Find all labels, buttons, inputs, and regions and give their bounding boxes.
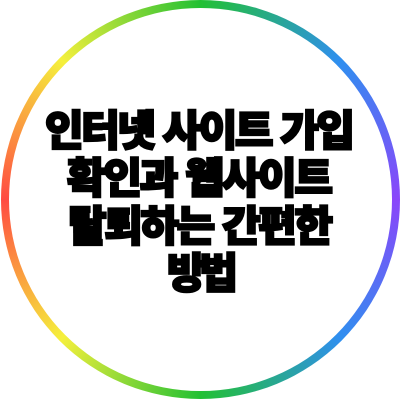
- title line 4: 방법: [167, 250, 238, 297]
- title line 2: 확인과 웹사이트: [67, 155, 333, 202]
- title line 1: 인터넷 사이트 가입: [45, 108, 355, 154]
- title line 3: 탈퇴하는 간편한: [68, 203, 333, 250]
